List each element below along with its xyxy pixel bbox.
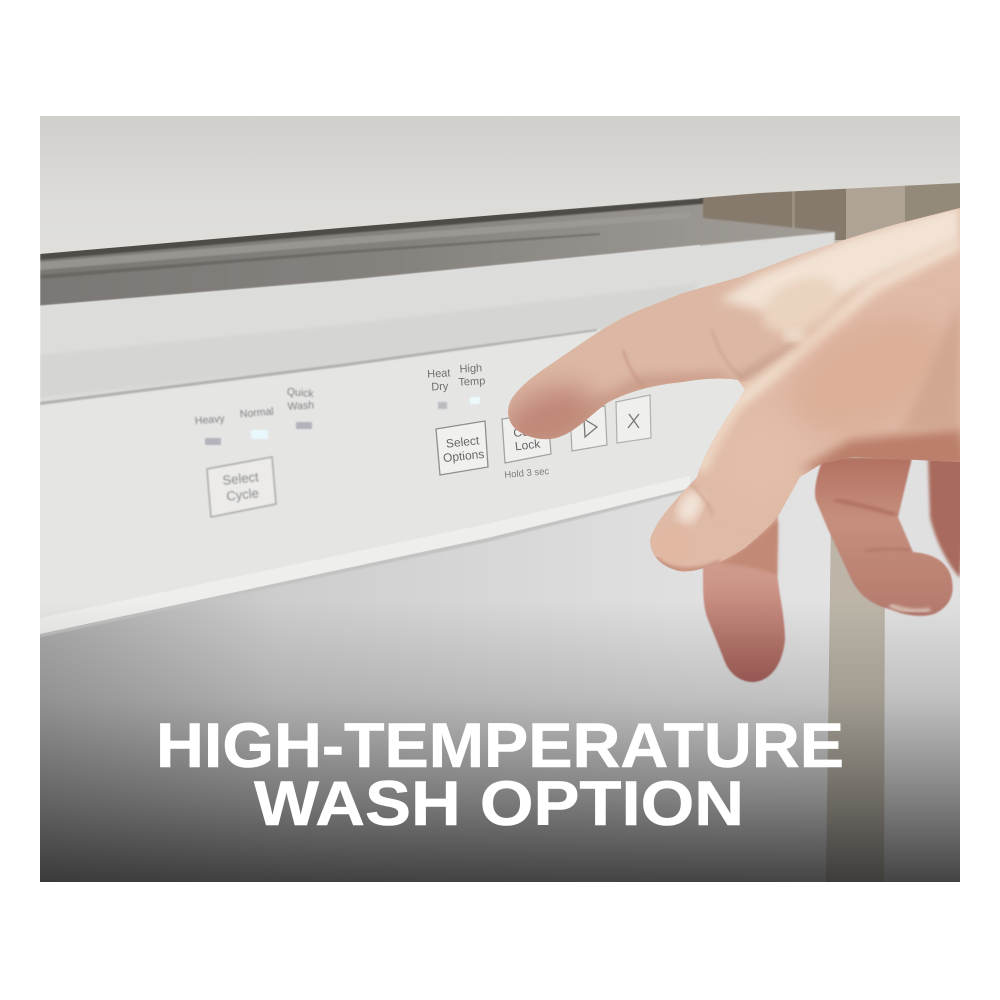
infographic photo scene [40, 116, 960, 882]
middle finger light edge [700, 243, 960, 470]
option labels [427, 362, 486, 393]
photograph [40, 116, 970, 882]
title [156, 711, 844, 839]
index finger creases [622, 350, 638, 381]
bottom dark gradient [40, 600, 960, 882]
title: WASH OPTION [254, 769, 744, 839]
base skin [500, 200, 970, 580]
upper countertop panel [40, 116, 960, 254]
cycle labels [194, 386, 315, 427]
option labels: Heat [427, 367, 451, 381]
hand [491, 200, 970, 682]
dark gap under countertop [40, 198, 835, 306]
top front of dishwasher door [40, 232, 835, 404]
small finger below the main finger [703, 510, 785, 682]
cycle labels: Wash [287, 399, 315, 413]
control lock button: Lock [514, 437, 542, 453]
palm underside [800, 428, 970, 470]
option indicator lights [438, 397, 480, 409]
cabinet trim at right [700, 180, 960, 882]
select cycle button: Select [222, 469, 260, 488]
pinky finger at far right [926, 460, 960, 579]
select cycle button: Cycle [226, 485, 259, 504]
cycle labels: Heavy [194, 413, 226, 427]
index finger colour [500, 200, 960, 442]
knuckle highlight [720, 205, 960, 320]
control panel strip [40, 328, 745, 637]
control lock button: Hold 3 sec [504, 466, 550, 481]
cancel button [616, 395, 651, 443]
select options button: Select [445, 433, 481, 451]
cycle labels: Normal [239, 406, 274, 420]
back of hand and index and middle fingers [491, 200, 970, 580]
middle finger body [790, 321, 938, 429]
cycle indicator lights [205, 422, 312, 445]
nail and tip highlight [673, 487, 707, 527]
select options button [436, 421, 488, 475]
right-hand shadow [904, 312, 960, 428]
title: HIGH-TEMPERATURE [156, 711, 844, 781]
select options button: Options [442, 447, 485, 465]
control lock button [501, 418, 552, 478]
start button [570, 406, 607, 451]
option labels: Dry [431, 381, 449, 393]
select cycle button [207, 457, 276, 517]
option labels: Temp [458, 375, 486, 389]
crease between index and middle finger [738, 345, 800, 378]
option labels: High [459, 362, 482, 376]
ring finger [815, 458, 953, 616]
lower door [40, 455, 832, 882]
cycle labels: Quick [286, 386, 315, 400]
control lock button: Control [513, 422, 553, 440]
fingertip shading [508, 374, 599, 440]
